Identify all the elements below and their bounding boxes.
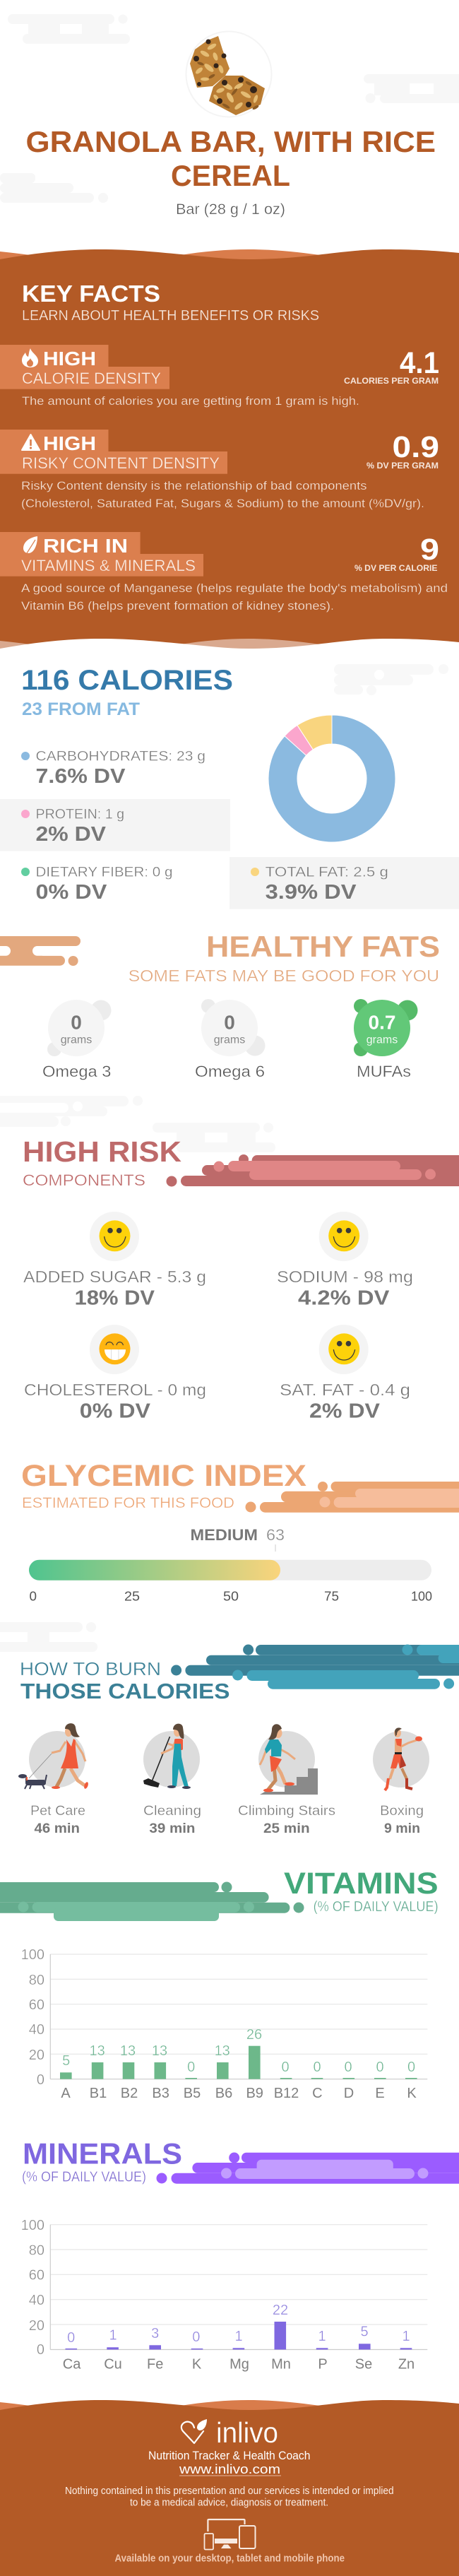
glycemic gauge: 75 — [324, 1589, 339, 1604]
heading: calories: 116 CALORIES — [21, 665, 233, 696]
legend: protein: PROTEIN: 1 g — [35, 807, 124, 822]
fact: risky content density — [0, 430, 439, 510]
stat: omega 3: 0 — [71, 1012, 82, 1034]
heading: minerals: (% OF DAILY VALUE) — [22, 2170, 146, 2185]
stat: mufas: 0.7 — [369, 1012, 395, 1034]
activity: boxing: Boxing — [380, 1804, 424, 1819]
activity: boxing — [373, 1727, 429, 1836]
activity: pet care — [18, 1723, 89, 1836]
bar chart: vitamins: 20 — [29, 2048, 44, 2063]
icon: smiley — [99, 1220, 130, 1251]
glycemic gauge: MEDIUM — [191, 1526, 258, 1544]
heading: calories: 23 FROM FAT — [22, 699, 140, 719]
risk item: saturated fat: 2% DV — [309, 1400, 381, 1423]
legend: carbohydrates: CARBOHYDRATES: 23 g — [35, 749, 205, 764]
title: CEREAL — [171, 159, 290, 192]
logo: inlivo — [181, 2416, 278, 2449]
bar chart: vitamins: B5 — [184, 2086, 201, 2101]
heading: minerals: MINERALS — [23, 2137, 182, 2170]
activity: pet care: 46 min — [34, 1821, 80, 1836]
risk item: saturated fat — [280, 1325, 410, 1423]
title — [25, 125, 436, 192]
bar chart: vitamins: 0 — [407, 2060, 415, 2075]
risk item: cholesterol: CHOLESTEROL - 0 mg — [24, 1381, 206, 1399]
stat: omega 3 — [42, 1000, 112, 1080]
heading: vitamins — [284, 1867, 439, 1915]
bar chart: minerals: 20 — [29, 2318, 44, 2334]
heading: high risk: HIGH RISK — [23, 1135, 181, 1168]
heading: vitamins: VITAMINS — [284, 1867, 439, 1901]
fact: risky content density: % DV PER GRAM — [366, 461, 439, 471]
bar chart: vitamins — [21, 1947, 427, 2101]
bar chart: vitamins: 0 — [344, 2060, 352, 2075]
bar chart: minerals: 1 — [318, 2329, 326, 2344]
glycemic gauge: 25 — [124, 1589, 140, 1604]
fact: rich in vitamins and minerals: VITAMINS & MINERALS — [21, 557, 196, 574]
icon: flame — [22, 348, 38, 367]
activity: climbing stairs: 25 min — [263, 1821, 310, 1836]
wave: key facts top (light layer) — [0, 249, 459, 265]
bar chart: minerals: Se — [355, 2357, 372, 2373]
footer availability note: Available on your desktop, tablet and mobile phone — [114, 2553, 345, 2565]
bar chart: vitamins: 0 — [37, 2072, 44, 2088]
heading: how to burn those calories — [20, 1658, 230, 1703]
icon: leaf — [23, 536, 37, 553]
risk item: cholesterol — [24, 1325, 206, 1423]
fact: rich in vitamins and minerals: Vitamin B6 (helps prevent formation of kidney stones). — [21, 599, 334, 613]
bar chart: vitamins: 26 — [246, 2027, 262, 2043]
risk item: added sugar: ADDED SUGAR - 5.3 g — [23, 1268, 206, 1286]
icon: person sweeping — [143, 1724, 191, 1789]
footer disclaimer — [65, 2486, 394, 2509]
stat: mufas: grams — [366, 1034, 398, 1046]
icon: grinning face — [99, 1333, 130, 1364]
background clouds: high risk — [0, 1096, 275, 1152]
background clouds: header — [0, 14, 459, 203]
serving size: Bar (28 g / 1 oz) — [176, 201, 285, 218]
activity: climbing stairs: Climbing Stairs — [238, 1804, 335, 1819]
bar chart: vitamins: B3 — [152, 2086, 169, 2101]
activity: boxing: 9 min — [384, 1821, 420, 1836]
glycemic gauge: 63 — [266, 1526, 285, 1544]
stat: omega 6 — [195, 999, 266, 1080]
bar chart: vitamins: 80 — [29, 1973, 44, 1988]
heading: glycemic index: ESTIMATED FOR THIS FOOD — [22, 1495, 234, 1511]
glycemic gauge: 100 — [411, 1589, 432, 1604]
bar chart: minerals: Ca — [63, 2357, 81, 2373]
bar chart: vitamins: A — [61, 2086, 71, 2101]
bar chart: minerals: 80 — [29, 2243, 44, 2259]
decoration: minerals bars — [157, 2152, 459, 2184]
footer tagline and link: Nutrition Tracker & Health Coach — [148, 2449, 311, 2462]
footer tagline and link — [148, 2449, 311, 2476]
bar chart: vitamins: 0 — [281, 2060, 290, 2075]
bar chart: minerals: 22 — [273, 2303, 288, 2318]
bar chart: vitamins: B1 — [90, 2086, 107, 2101]
bar chart: minerals: 40 — [29, 2293, 44, 2308]
fact: rich in vitamins and minerals — [0, 532, 448, 613]
bar chart: minerals — [21, 2218, 427, 2373]
bar chart: minerals: K — [192, 2357, 202, 2373]
legend: protein — [21, 807, 124, 846]
stat: omega 6: Omega 6 — [195, 1063, 265, 1080]
icon: devices — [205, 2519, 256, 2549]
activity: cleaning: Cleaning — [143, 1804, 201, 1819]
stat: mufas — [354, 999, 418, 1080]
risk item: added sugar — [23, 1212, 206, 1310]
bar chart: minerals: 100 — [21, 2218, 44, 2233]
fact: calorie density — [0, 345, 439, 408]
bar chart: minerals: 60 — [29, 2268, 44, 2283]
decoration: glycemic index bars — [246, 1482, 459, 1513]
footer disclaimer: to be a medical advice, diagnosis or treatment. — [130, 2498, 328, 2509]
fact: rich in vitamins and minerals: 9 — [420, 533, 439, 567]
stat: omega 6: 0 — [224, 1012, 235, 1034]
bar chart: minerals: 1 — [234, 2329, 243, 2344]
heading: healthy fats: HEALTHY FATS — [206, 930, 440, 963]
risk item: sodium — [277, 1212, 413, 1310]
legend: total fat — [251, 865, 388, 904]
bar chart: vitamins: K — [407, 2086, 417, 2101]
glycemic gauge: 50 — [223, 1589, 239, 1604]
heading: healthy fats — [129, 930, 440, 985]
bar chart: minerals: 1 — [109, 2328, 117, 2344]
bar chart: vitamins: C — [312, 2086, 323, 2101]
heading: key facts: LEARN ABOUT HEALTH BENEFITS OR RISKS — [22, 308, 319, 324]
footer disclaimer: Nothing contained in this presentation and our services is intended or implied — [65, 2486, 394, 2497]
heading: minerals — [22, 2137, 182, 2185]
fact: rich in vitamins and minerals: A good source of Manganese (helps regulate the body's metabolism) and — [21, 581, 448, 595]
bar chart: minerals: 0 — [67, 2330, 75, 2346]
icon: warning triangle — [22, 435, 40, 450]
decoration: vitamins bars — [0, 1882, 304, 1921]
food photo: granola bar in circle — [186, 31, 271, 117]
bar chart: vitamins: 0 — [187, 2060, 195, 2075]
bar chart: minerals: 3 — [151, 2326, 159, 2341]
stat: omega 6: grams — [214, 1034, 245, 1046]
fact: risky content density: (Cholesterol, Saturated Fat, Sugars & Sodium) to the amount (%DV/gr). — [21, 497, 424, 510]
heading: vitamins: (% OF DAILY VALUE) — [314, 1899, 439, 1915]
risk item: cholesterol: 0% DV — [80, 1400, 151, 1423]
activity: cleaning: 39 min — [149, 1821, 195, 1836]
fact: risky content density: HIGH — [43, 432, 96, 454]
glycemic gauge — [29, 1526, 432, 1604]
fact: rich in vitamins and minerals: % DV PER CALORIE — [354, 563, 438, 573]
decoration: high risk bars — [167, 1154, 459, 1187]
fact: risky content density: Risky Content density is the relationship of bad components — [21, 479, 367, 492]
icon: smiley — [328, 1333, 359, 1364]
fact: risky content density: 0.9 — [393, 430, 439, 464]
stat: omega 3: Omega 3 — [42, 1063, 112, 1080]
fact: risky content density: RISKY CONTENT DENSITY — [22, 454, 220, 472]
bar chart: minerals: P — [318, 2357, 328, 2373]
activity: pet care: Pet Care — [30, 1804, 85, 1819]
bar chart: vitamins: 5 — [62, 2053, 70, 2069]
heading: calories — [21, 665, 233, 719]
icon: smiley — [328, 1220, 359, 1251]
bar chart: vitamins: 13 — [89, 2043, 105, 2059]
risk item: sodium: 4.2% DV — [298, 1287, 390, 1310]
bar chart: minerals: 1 — [402, 2329, 410, 2344]
title: GRANOLA BAR, WITH RICE — [25, 125, 436, 158]
bar chart: vitamins: 13 — [215, 2043, 230, 2059]
risk item: saturated fat: SAT. FAT - 0.4 g — [280, 1381, 410, 1399]
icon: boxer — [385, 1727, 422, 1790]
legend: protein: 2% DV — [35, 823, 107, 846]
bar chart: vitamins: 13 — [120, 2043, 136, 2059]
heading: glycemic index — [21, 1459, 306, 1511]
bar chart: vitamins: B12 — [274, 2086, 299, 2101]
bar chart: vitamins: 0 — [376, 2060, 384, 2075]
bar chart: vitamins: E — [375, 2086, 385, 2101]
heading: how to burn those calories: THOSE CALORIES — [20, 1679, 230, 1703]
heading: glycemic index: GLYCEMIC INDEX — [21, 1459, 306, 1493]
glycemic gauge: 0 — [30, 1589, 37, 1604]
bar chart: minerals: Fe — [147, 2357, 163, 2373]
background cloud: calories — [334, 664, 448, 695]
panel: footer background — [0, 2400, 459, 2576]
bar chart: vitamins: B6 — [215, 2086, 232, 2101]
legend: carbohydrates: 7.6% DV — [35, 765, 126, 788]
icon: person climbing stairs — [260, 1724, 318, 1795]
decoration: healthy fats bars — [0, 936, 81, 966]
heading: healthy fats: SOME FATS MAY BE GOOD FOR YOU — [129, 967, 439, 985]
bar chart: vitamins: B9 — [246, 2086, 263, 2101]
logo: inlivo: inlivo — [216, 2416, 278, 2449]
fact: calorie density: HIGH — [43, 348, 96, 370]
bar chart: minerals: Cu — [104, 2357, 122, 2373]
legend: dietary fiber — [21, 865, 172, 904]
heading: high risk: COMPONENTS — [23, 1171, 145, 1189]
wave: key facts bottom — [0, 639, 459, 658]
bar chart: minerals: Mg — [230, 2357, 249, 2373]
risk item: added sugar: 18% DV — [75, 1287, 155, 1310]
bar chart: minerals: Mn — [271, 2357, 291, 2373]
legend: dietary fiber: 0% DV — [35, 881, 107, 904]
bar chart: minerals: Zn — [398, 2357, 415, 2373]
bar chart: minerals: 0 — [192, 2329, 200, 2345]
heading: key facts: KEY FACTS — [22, 281, 160, 307]
icon: woman walking dog — [18, 1723, 89, 1790]
legend: total fat: 3.9% DV — [266, 881, 357, 904]
bar chart: vitamins: D — [344, 2086, 354, 2101]
bar chart: vitamins: 13 — [152, 2043, 167, 2059]
fact: rich in vitamins and minerals: RICH IN — [43, 535, 128, 557]
legend: total fat: TOTAL FAT: 2.5 g — [266, 865, 388, 880]
legend: carbohydrates — [21, 749, 205, 788]
panel: key facts background — [0, 249, 459, 654]
activity: climbing stairs — [238, 1724, 335, 1836]
fact: calorie density: CALORIES PER GRAM — [344, 376, 439, 386]
background cloud: burn section — [0, 1622, 97, 1652]
heading: how to burn those calories: HOW TO BURN — [20, 1658, 161, 1679]
fact: calorie density: The amount of calories you are getting from 1 gram is high. — [22, 394, 359, 408]
bar chart: vitamins: B2 — [121, 2086, 138, 2101]
bar chart: vitamins: 60 — [29, 1997, 44, 2013]
decoration: burn bars — [171, 1645, 459, 1689]
legend background panels — [0, 799, 459, 909]
stat: mufas: MUFAs — [357, 1063, 411, 1080]
fact: calorie density: CALORIE DENSITY — [22, 370, 161, 387]
legend: dietary fiber: DIETARY FIBER: 0 g — [35, 865, 172, 880]
heading: high risk — [23, 1135, 181, 1189]
bar chart: minerals: 0 — [37, 2342, 44, 2358]
activity: cleaning — [143, 1724, 201, 1836]
bar chart: vitamins: 40 — [29, 2022, 44, 2038]
stat: omega 3: grams — [61, 1034, 92, 1046]
bar chart: minerals: 5 — [360, 2324, 369, 2340]
bar chart: vitamins: 0 — [313, 2060, 321, 2075]
fact: calorie density: 4.1 — [400, 346, 439, 380]
risk item: sodium: SODIUM - 98 mg — [277, 1268, 413, 1286]
footer tagline and link: www.inlivo.com — [179, 2462, 280, 2476]
bar chart: vitamins: 100 — [21, 1947, 44, 1963]
heading: key facts — [22, 281, 319, 324]
donut chart: calorie sources — [268, 715, 395, 842]
